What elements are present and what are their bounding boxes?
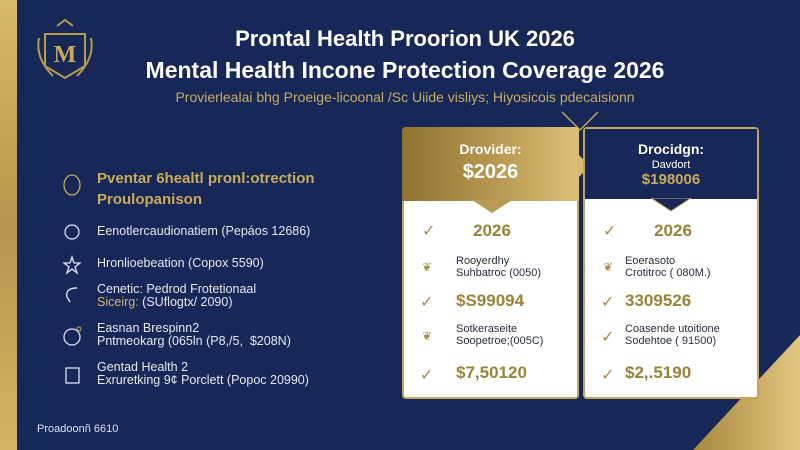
connector V [562,112,598,131]
text: Mental Health Incone Protection Coverage 2026 [146,57,664,83]
card: provider 1 [402,127,579,399]
card: provider 1: Suhbatroc (0050) [456,267,541,279]
item 5 [65,360,309,387]
list items: Easnan Brespinn2 [97,321,199,335]
card: provider 2: Sodehtoe ( 91500) [625,335,716,347]
card: provider 2: 3309526 [625,291,691,310]
card: provider 1: ❦ [422,260,432,274]
section heading: Pventar 6healtl pronl:otrection [97,170,315,187]
emblem [37,18,93,79]
card: provider 1: $2026 [463,161,518,183]
card: provider 1: ✓ [420,294,433,311]
item 1 [64,224,310,240]
card: provider 2: Davdort [652,159,690,171]
card: provider 2: Drocidgn: [638,141,704,157]
item 3 [66,282,256,309]
card: provider 1: Soopetroe;(005C) [456,335,543,347]
card: provider 2: $198006 [642,171,700,188]
footer: Proadoonñ 6610 [37,423,118,435]
title: Prontal Health Proorion UK 2026 [235,26,575,51]
item 2 [62,255,264,275]
card: provider 2: ✓ [601,367,614,384]
card: provider 1: ❦ [422,329,432,343]
card: provider 1: Rooyerdhy [456,255,509,267]
header gold [402,127,579,201]
list items: Siceirg: (SUflogtx/ 2090) [97,295,232,309]
card: provider 2: $2,.5190 [625,363,691,382]
list items: Cenetic: Pedrod Frotetionaal [97,282,256,296]
gold left strip [0,0,17,450]
card: provider 1: $7,50120 [456,363,527,382]
card: provider 2: ✓ [601,329,614,346]
card: provider 2 [583,127,759,399]
list items [62,224,310,387]
card: provider 1: ✓ [422,223,435,240]
list items: Pntmeokarg (065ln (P8,/5, $208N) [97,334,291,348]
card: provider 2: ✓ [603,223,616,240]
header navy [585,129,757,199]
subtitle: Provierlealai bhg Proeige-licoonal /Sc Uiide visliys; Hiyosicois pdecaisionn [175,89,635,105]
card: provider 1: Drovider: [459,141,522,157]
icon: head [63,174,81,196]
card: provider 1: $S99094 [456,291,524,310]
list items: Gentad Health 2 [97,360,188,374]
emblem: M [54,42,76,68]
list items: Hronlioebeation (Coрox 5590) [97,256,264,270]
card: provider 2: ✓ [601,294,614,311]
card: provider 1: 2026 [473,221,511,240]
card: provider 2: Coasende utoitione [625,323,720,335]
item 4 [63,321,291,348]
card: provider 2: Eoerasoto [625,255,675,267]
list items: Eenotlercaudionatiem (Pepáos 12686) [97,224,310,238]
list items: Exruretking 9¢ Porclett (Popoc 20990) [97,373,309,387]
section heading: Proulopanison [97,191,202,208]
card: provider 1: ✓ [420,367,433,384]
card: provider 2: ❦ [603,260,613,274]
card: provider 2: Crotitroc ( 080M.) [625,267,711,279]
card: provider 1: Sotkeraseite [456,323,517,335]
card: provider 2: 2026 [654,221,692,240]
section heading [97,170,315,208]
